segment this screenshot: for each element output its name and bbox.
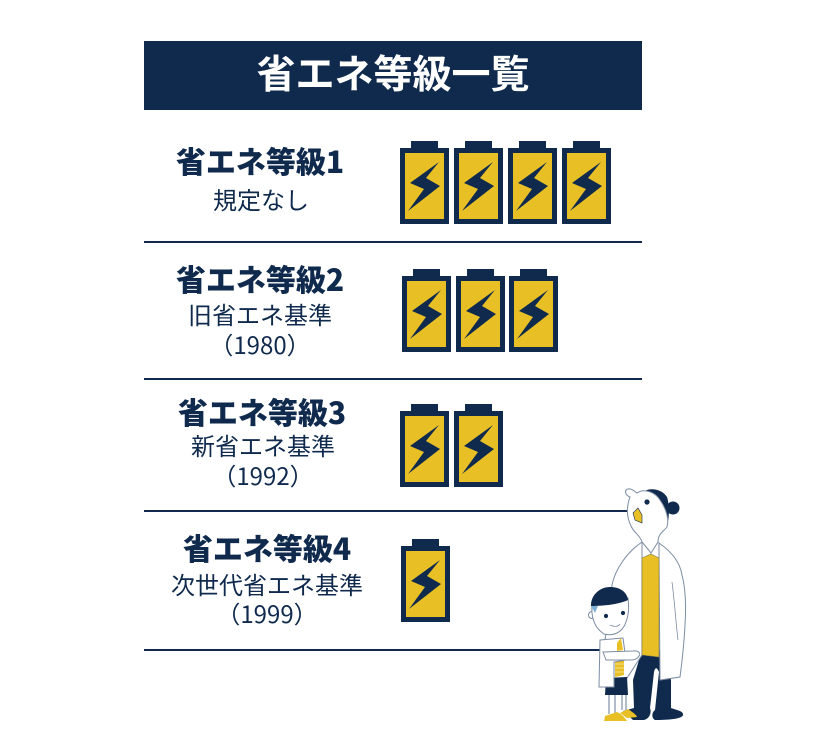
row 2 description: 旧省エネ基準: [188, 296, 332, 331]
row 3 description: [191, 427, 335, 492]
batteries: row 3: [400, 404, 503, 487]
batteries: row 2: [402, 269, 558, 352]
row 2 description: [188, 296, 332, 360]
child figure: [588, 587, 640, 721]
row 4 description: （1999）: [216, 594, 318, 630]
title banner: [144, 41, 642, 110]
row 4 description: [171, 566, 363, 630]
row 1 heading: 省エネ等級1: [176, 138, 344, 182]
row 4 heading: 省エネ等級4: [183, 525, 351, 569]
row 2 description: （1980）: [209, 326, 311, 360]
illustration: adult and child in lab coats: [588, 489, 686, 721]
row 3 divider: [144, 510, 642, 512]
row 4 divider: [144, 649, 642, 651]
batteries: row 4: [401, 539, 450, 622]
row 3 description: （1992）: [212, 457, 314, 492]
row 4 description: 次世代省エネ基準: [171, 566, 363, 601]
row 3 description: 新省エネ基準: [191, 427, 335, 462]
row 2 heading: 省エネ等級2: [176, 256, 344, 300]
row 2 divider: [144, 378, 642, 380]
batteries: row 1: [400, 141, 611, 224]
title text: 省エネ等級一覧: [256, 44, 530, 100]
row 1 description: 規定なし: [213, 181, 309, 216]
adult figure: [600, 489, 686, 720]
row 1 divider: [144, 241, 642, 243]
row 3 heading: 省エネ等級3: [178, 389, 346, 433]
